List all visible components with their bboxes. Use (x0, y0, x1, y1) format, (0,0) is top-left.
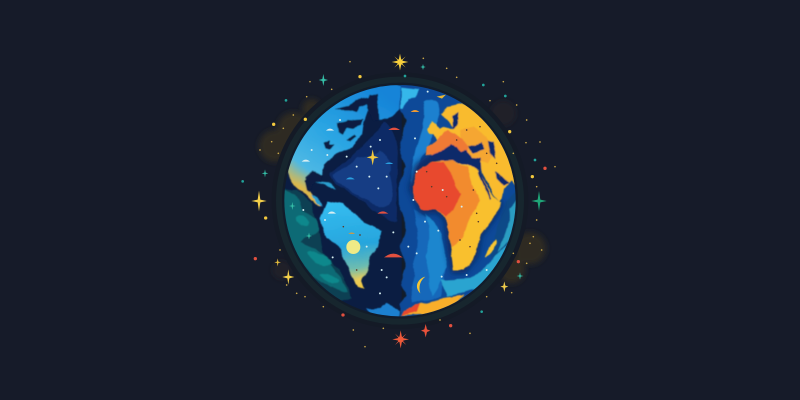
teal western limb (270, 187, 352, 307)
surface dots (303, 92, 502, 293)
globe (284, 85, 516, 316)
star: left yellow (251, 191, 267, 211)
western hemisphere ocean (285, 85, 402, 316)
star: lower right yellow (500, 281, 508, 292)
star: right green (531, 191, 547, 211)
sun disc (346, 240, 360, 254)
star: lower left yellow (282, 269, 294, 285)
south america (320, 201, 382, 289)
atlantic deep layers (329, 122, 398, 222)
infographic: split globe in starry space (241, 54, 556, 348)
star: inside globe (367, 149, 379, 165)
nebula haze (259, 99, 546, 283)
crescent moon (417, 277, 425, 293)
eurasia (426, 103, 520, 202)
star: teal sparks (262, 64, 523, 280)
stars (251, 54, 547, 348)
star field dots (243, 58, 555, 347)
greenland patch (401, 87, 419, 108)
antarctica west (366, 303, 399, 317)
antarctica east (401, 295, 464, 316)
star: top gold (392, 54, 408, 70)
north america (287, 85, 400, 206)
eastern hemisphere ocean (398, 85, 516, 316)
star: small yellow (274, 258, 281, 266)
mediterranean and black sea (429, 112, 508, 187)
africa (412, 161, 502, 270)
arctic islands and hudson bay (324, 93, 379, 149)
star: bottom small red (421, 324, 430, 337)
clouds (302, 95, 446, 257)
star: bottom red (392, 330, 409, 348)
madagascar (485, 239, 496, 258)
globe outer ring (272, 72, 528, 329)
shadow round africa (408, 153, 503, 273)
